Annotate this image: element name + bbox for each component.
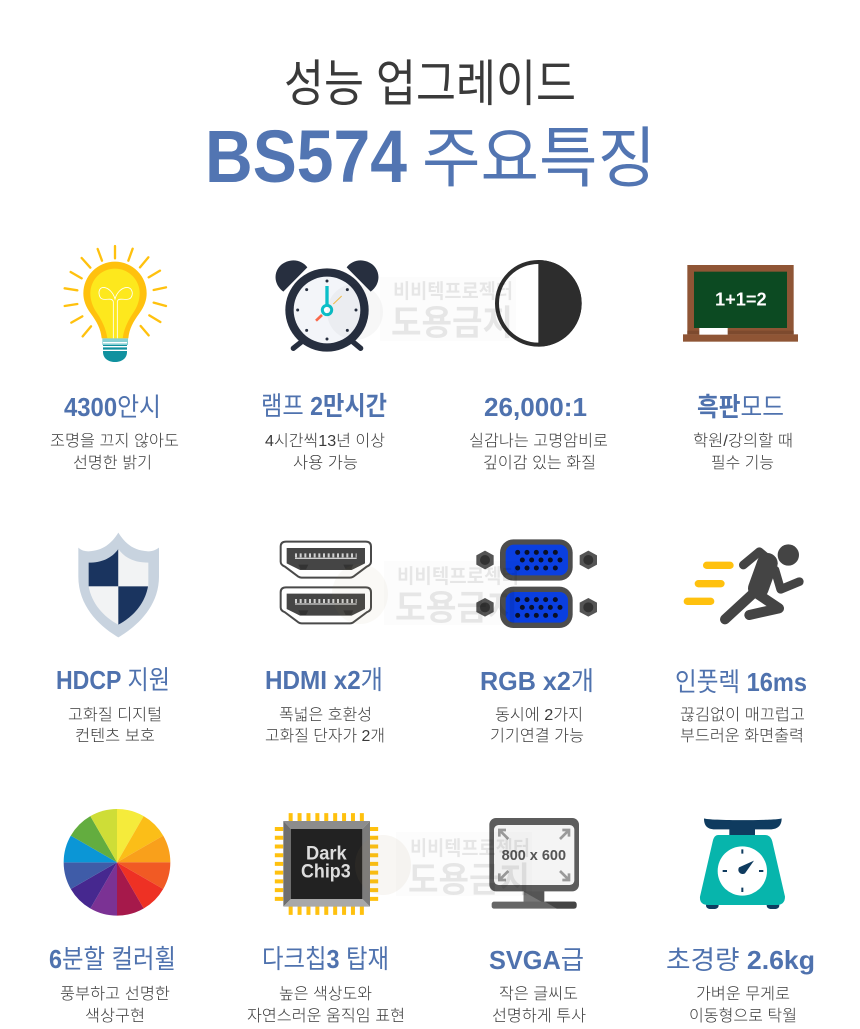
title line 2: 주요특징 [422,121,656,195]
description [60,985,170,1025]
heading: HDMI x2개 [265,665,383,695]
description [265,706,385,745]
icon: chip [279,817,374,911]
icon: color wheel [64,809,170,916]
description [492,985,586,1025]
heading: 다크칩3 탑재 [262,944,389,974]
feature: 4300 lumens [50,246,179,472]
icon: monitor: 800 x 600 [502,848,566,864]
description: 기기연결 가능 [490,727,584,745]
icon: monitor [489,818,579,909]
icon: HDMI ports [281,542,371,623]
description: 부드러운 화면출력 [680,727,804,745]
icon: blackboard [683,265,798,342]
description: 학원/강의할 때 [693,432,793,450]
description: 자연스러운 움직임 표현 [247,1007,405,1025]
description: 풍부하고 선명한 [60,985,170,1003]
feature: SVGA [489,818,586,1025]
description: 선명하게 투사 [492,1007,586,1025]
heading: 26,000:1 [484,392,587,422]
description: 사용 가능 [293,454,358,472]
icon: blackboard: 1+1=2 [715,289,767,310]
watermark row 1: 도용금지 [391,304,513,343]
description [693,432,793,472]
heading: HDCP 지원 [56,665,170,695]
description: 고화질 디지털 [68,706,162,724]
title line 1: 성능 업그레이드 [284,56,576,112]
feature: input lag [675,544,807,745]
feature: blackboard mode [683,265,798,472]
icon: scale [700,818,785,909]
heading: 인풋렉 16ms [675,667,807,697]
heading: SVGA급 [489,945,584,975]
heading: RGB x2개 [480,666,594,696]
icon: contrast circle [497,260,582,347]
description: 실감나는 고명암비로 [469,432,608,450]
watermark row 1 [327,277,516,343]
description [490,706,584,745]
description [68,706,162,745]
description: 조명을 끄지 않아도 [50,432,179,450]
icon: running person [687,544,799,619]
feature: HDMI [265,542,385,745]
watermark row 3: 도용금지 [408,861,530,900]
icon: light bulb [65,246,166,362]
description: 고화질 단자가 2개 [265,727,385,745]
description: 색상구현 [85,1007,145,1025]
description [265,432,385,472]
description [50,432,179,472]
heading: 6분할 컬러휠 [49,944,176,974]
feature: weight [666,818,815,1025]
icon: shield [78,533,159,637]
description: 필수 기능 [711,454,774,472]
watermark row 2: 비비텍프로젝터 [397,565,519,588]
heading: 흑판모드 [697,392,784,422]
feature: RGB [476,539,597,745]
icon: alarm clock [276,260,378,352]
description: 끊김없이 매끄럽고 [680,706,805,724]
title model name: BS574 [205,115,407,198]
description: 컨텐츠 보호 [75,727,155,745]
description: 높은 색상도와 [279,985,372,1003]
description: 4시간씩13년 이상 [265,432,385,450]
description [680,706,805,745]
feature: color wheel [49,809,176,1025]
feature: dark chip [247,817,405,1025]
icon: VGA ports [476,539,597,628]
watermark row 1: 비비텍프로젝터 [393,280,513,303]
description: 작은 글씨도 [499,985,578,1003]
description [689,985,797,1025]
watermark row 3 [355,832,532,900]
heading: 4300안시 [64,392,161,422]
description: 이동형으로 탁월 [689,1007,797,1025]
description [469,432,608,472]
feature: lamp life [261,260,387,472]
feature: HDCP [56,533,170,745]
description [247,985,405,1025]
watermark row 3: 비비텍프로젝터 [410,837,530,860]
description: 선명한 밝기 [73,454,152,472]
title [205,56,656,198]
description: 폭넓은 호환성 [279,706,372,724]
description: 가벼운 무게로 [696,985,790,1003]
heading: 램프 2만시간 [261,391,387,421]
description: 깊이감 있는 화질 [483,454,596,472]
watermark row 2: 도용금지 [395,589,518,628]
icon: chip: Chip3 [301,861,351,882]
icon: chip: Dark [306,843,347,864]
watermark row 2 [332,561,520,628]
feature: contrast [469,260,608,472]
description: 동시에 2가지 [495,706,583,724]
heading: 초경량 2.6kg [666,945,815,975]
